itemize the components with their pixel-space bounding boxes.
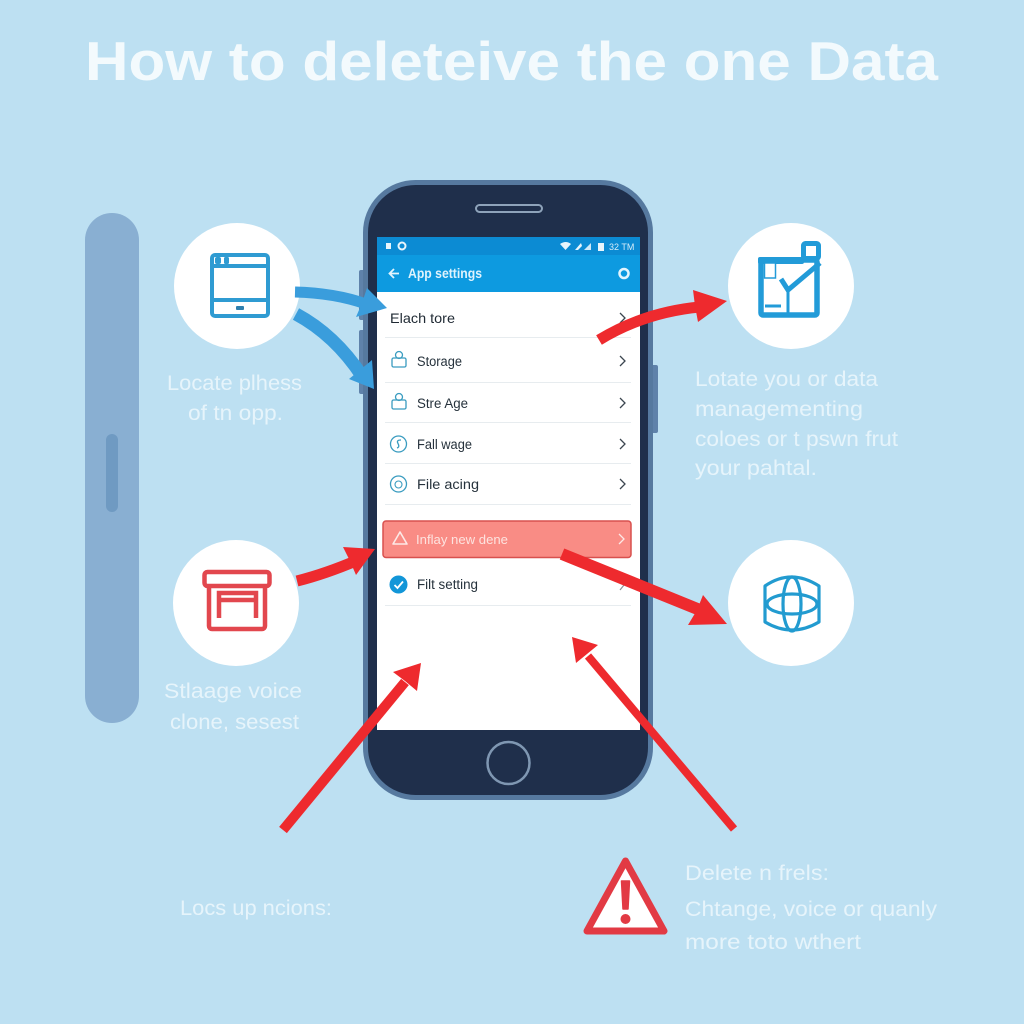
label: storage voice: Stlaage voice [164, 680, 302, 703]
row: Fall wage: Fall wage [417, 437, 472, 452]
label: delete files: Delete n frels: [685, 862, 829, 885]
highlighted row: Inflay new dene [416, 532, 508, 547]
row: Filt setting: Filt setting [417, 577, 478, 592]
icon circle: checklist edit [728, 223, 854, 349]
arrow: blue to storage row [296, 314, 374, 389]
decorative side bar [85, 213, 139, 723]
label: data management: Lotate you or data [695, 368, 878, 391]
row: Filt setting [385, 576, 631, 606]
arrow: red to app icon [599, 290, 727, 340]
phone body [366, 182, 650, 798]
label: storage voice: clone, sesest [170, 711, 299, 734]
label: locs up: Locs up ncions: [180, 897, 332, 920]
icon circle: app window [174, 223, 300, 349]
icon circle: globe cylinder [728, 540, 854, 666]
arrow: blue to first row [295, 288, 387, 317]
arrow: red to globe icon [562, 554, 727, 625]
label: delete files: more toto wthert [685, 931, 861, 954]
row: Storage: Storage [417, 354, 462, 369]
icon circle: red storage box [173, 540, 299, 666]
arrow: red diagonal left [283, 663, 421, 830]
label: delete files: Chtange, voice or quanly [685, 898, 938, 921]
label: delete files [685, 862, 938, 954]
label: storage voice [164, 680, 302, 734]
phone [359, 182, 658, 798]
row: File acing: File acing [417, 477, 479, 492]
label: data management: managementing [695, 398, 863, 421]
label: locate [167, 372, 302, 425]
label: data management: your pahtal. [695, 457, 817, 480]
label: data management: coloes or t pswn frut [695, 428, 898, 451]
app bar: App settings [408, 266, 482, 281]
phone home button [488, 742, 530, 784]
icon: warning triangle [587, 861, 664, 931]
row: Elach tore: Elach tore [390, 310, 455, 326]
label: locate: Locate plhess [167, 372, 302, 395]
row: Elach tore [385, 310, 631, 338]
row: Stre Age: Stre Age [417, 396, 468, 411]
phone screen [377, 237, 640, 730]
row: Stre Age [385, 394, 631, 423]
phone speaker [476, 205, 542, 212]
label: locate: of tn opp. [188, 402, 283, 425]
status bar [377, 237, 640, 256]
status bar: 32 TM [609, 242, 634, 252]
row: Fall wage [385, 436, 631, 464]
phone side buttons [359, 270, 658, 433]
arrow: red from storage icon [297, 547, 375, 581]
title: How to deleteive the one Data [85, 30, 938, 92]
label: data management [695, 368, 898, 480]
arrow: red diagonal right [572, 637, 734, 829]
app bar [377, 255, 640, 292]
highlighted row [383, 521, 631, 558]
row: File acing [385, 476, 631, 505]
row: Storage [385, 352, 631, 383]
